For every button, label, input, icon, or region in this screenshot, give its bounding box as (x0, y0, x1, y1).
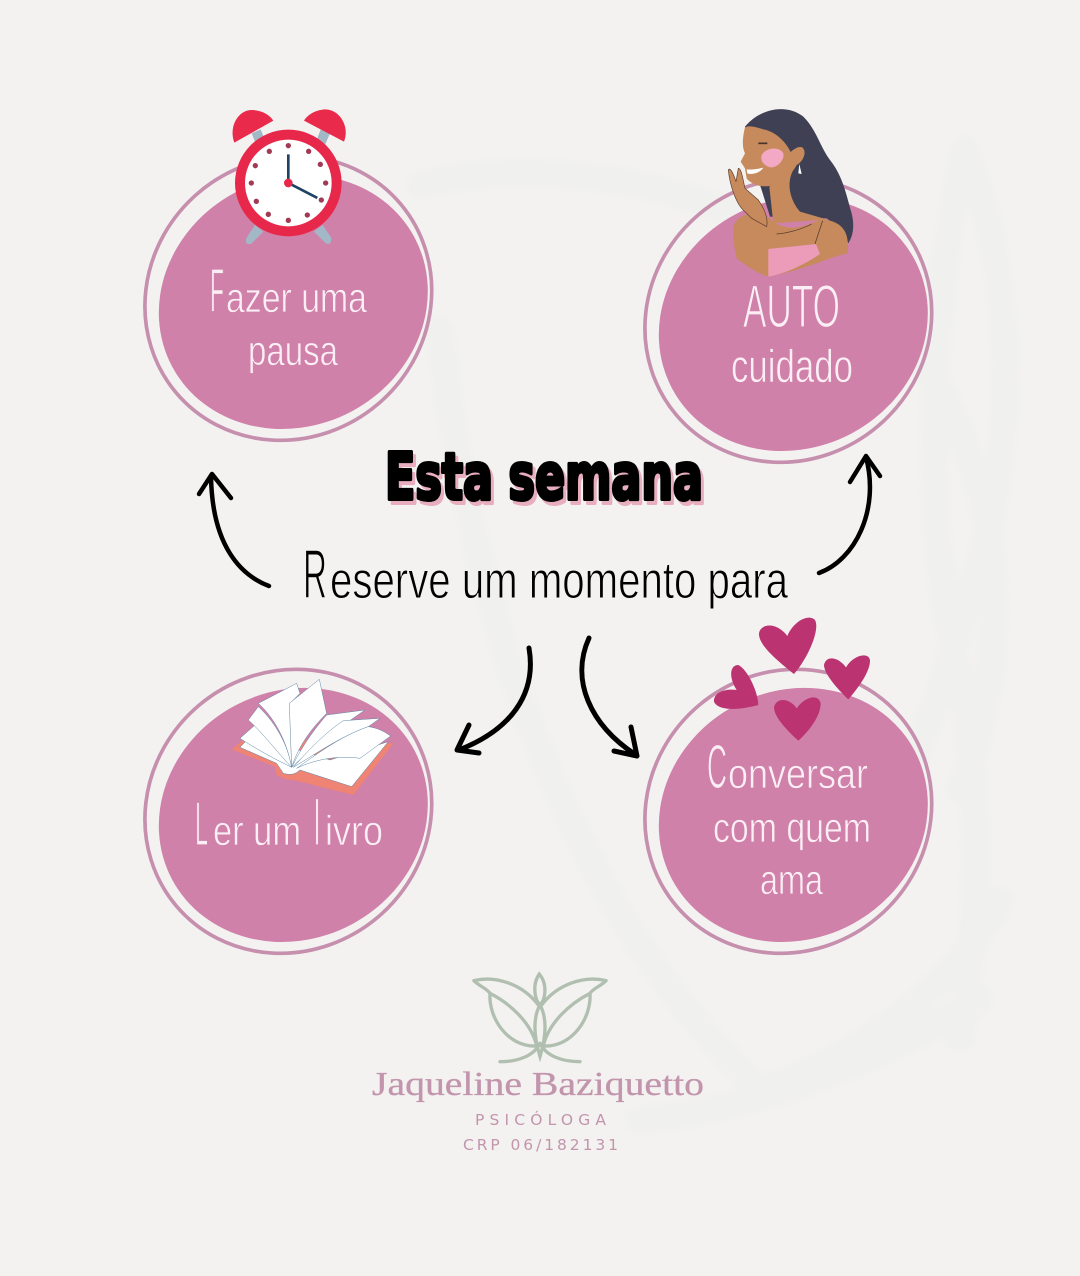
label: ler um livro: L (195, 790, 208, 859)
logo: name: Jaqueline Baziquetto (372, 1066, 704, 1103)
icon: alarm clock (233, 109, 346, 244)
panel: ler um livro (87, 611, 490, 1012)
label: conversar com quem ama: onversar (728, 750, 868, 797)
subheading: reserve um momento para (303, 535, 788, 613)
heading: esta semana: Esta semana (388, 445, 706, 519)
label: ler um livro: l (314, 787, 320, 859)
label: fazer uma pausa: pausa (248, 327, 339, 374)
label: conversar com quem ama (707, 733, 871, 903)
label: auto cuidado: cuidado (731, 340, 853, 392)
label: fazer uma pausa: F (210, 257, 224, 326)
heading: esta semana (385, 441, 706, 519)
logo: registration number: CRP 06/182131 (463, 1136, 618, 1154)
icon: woman applying face mask (728, 109, 853, 277)
panel: conversar com quem ama (587, 611, 990, 1012)
arrow: to autocuidado (819, 456, 880, 573)
arrow: to conversar (582, 638, 637, 756)
label: fazer uma pausa (210, 257, 368, 374)
panel: fazer uma pausa (87, 98, 490, 499)
panel: autocuidado (587, 109, 990, 521)
heading: esta semana: Esta semana (385, 441, 703, 515)
label: ler um livro: ivro (325, 807, 383, 854)
subheading: reserve um momento para: R (303, 535, 327, 613)
label: conversar com quem ama: C (707, 733, 727, 802)
label: fazer uma pausa: azer uma (226, 274, 368, 321)
logo: role: PSICÓLOGA (475, 1110, 606, 1129)
label: ler um livro: er um (213, 807, 301, 854)
label: auto cuidado (731, 273, 853, 392)
icon: open book (232, 679, 393, 795)
arrow: to fazer uma pausa (199, 474, 269, 586)
label: auto cuidado: AUTO (743, 273, 840, 340)
label: conversar com quem ama: ama (760, 856, 823, 903)
logo: butterfly mark (474, 974, 606, 1062)
arrow: to ler um livro (457, 648, 530, 753)
label: ler um livro (195, 787, 383, 859)
icon: hearts (714, 618, 870, 741)
subheading: reserve um momento para: eserve um momento para (330, 552, 788, 610)
label: conversar com quem ama: com quem (713, 804, 871, 851)
